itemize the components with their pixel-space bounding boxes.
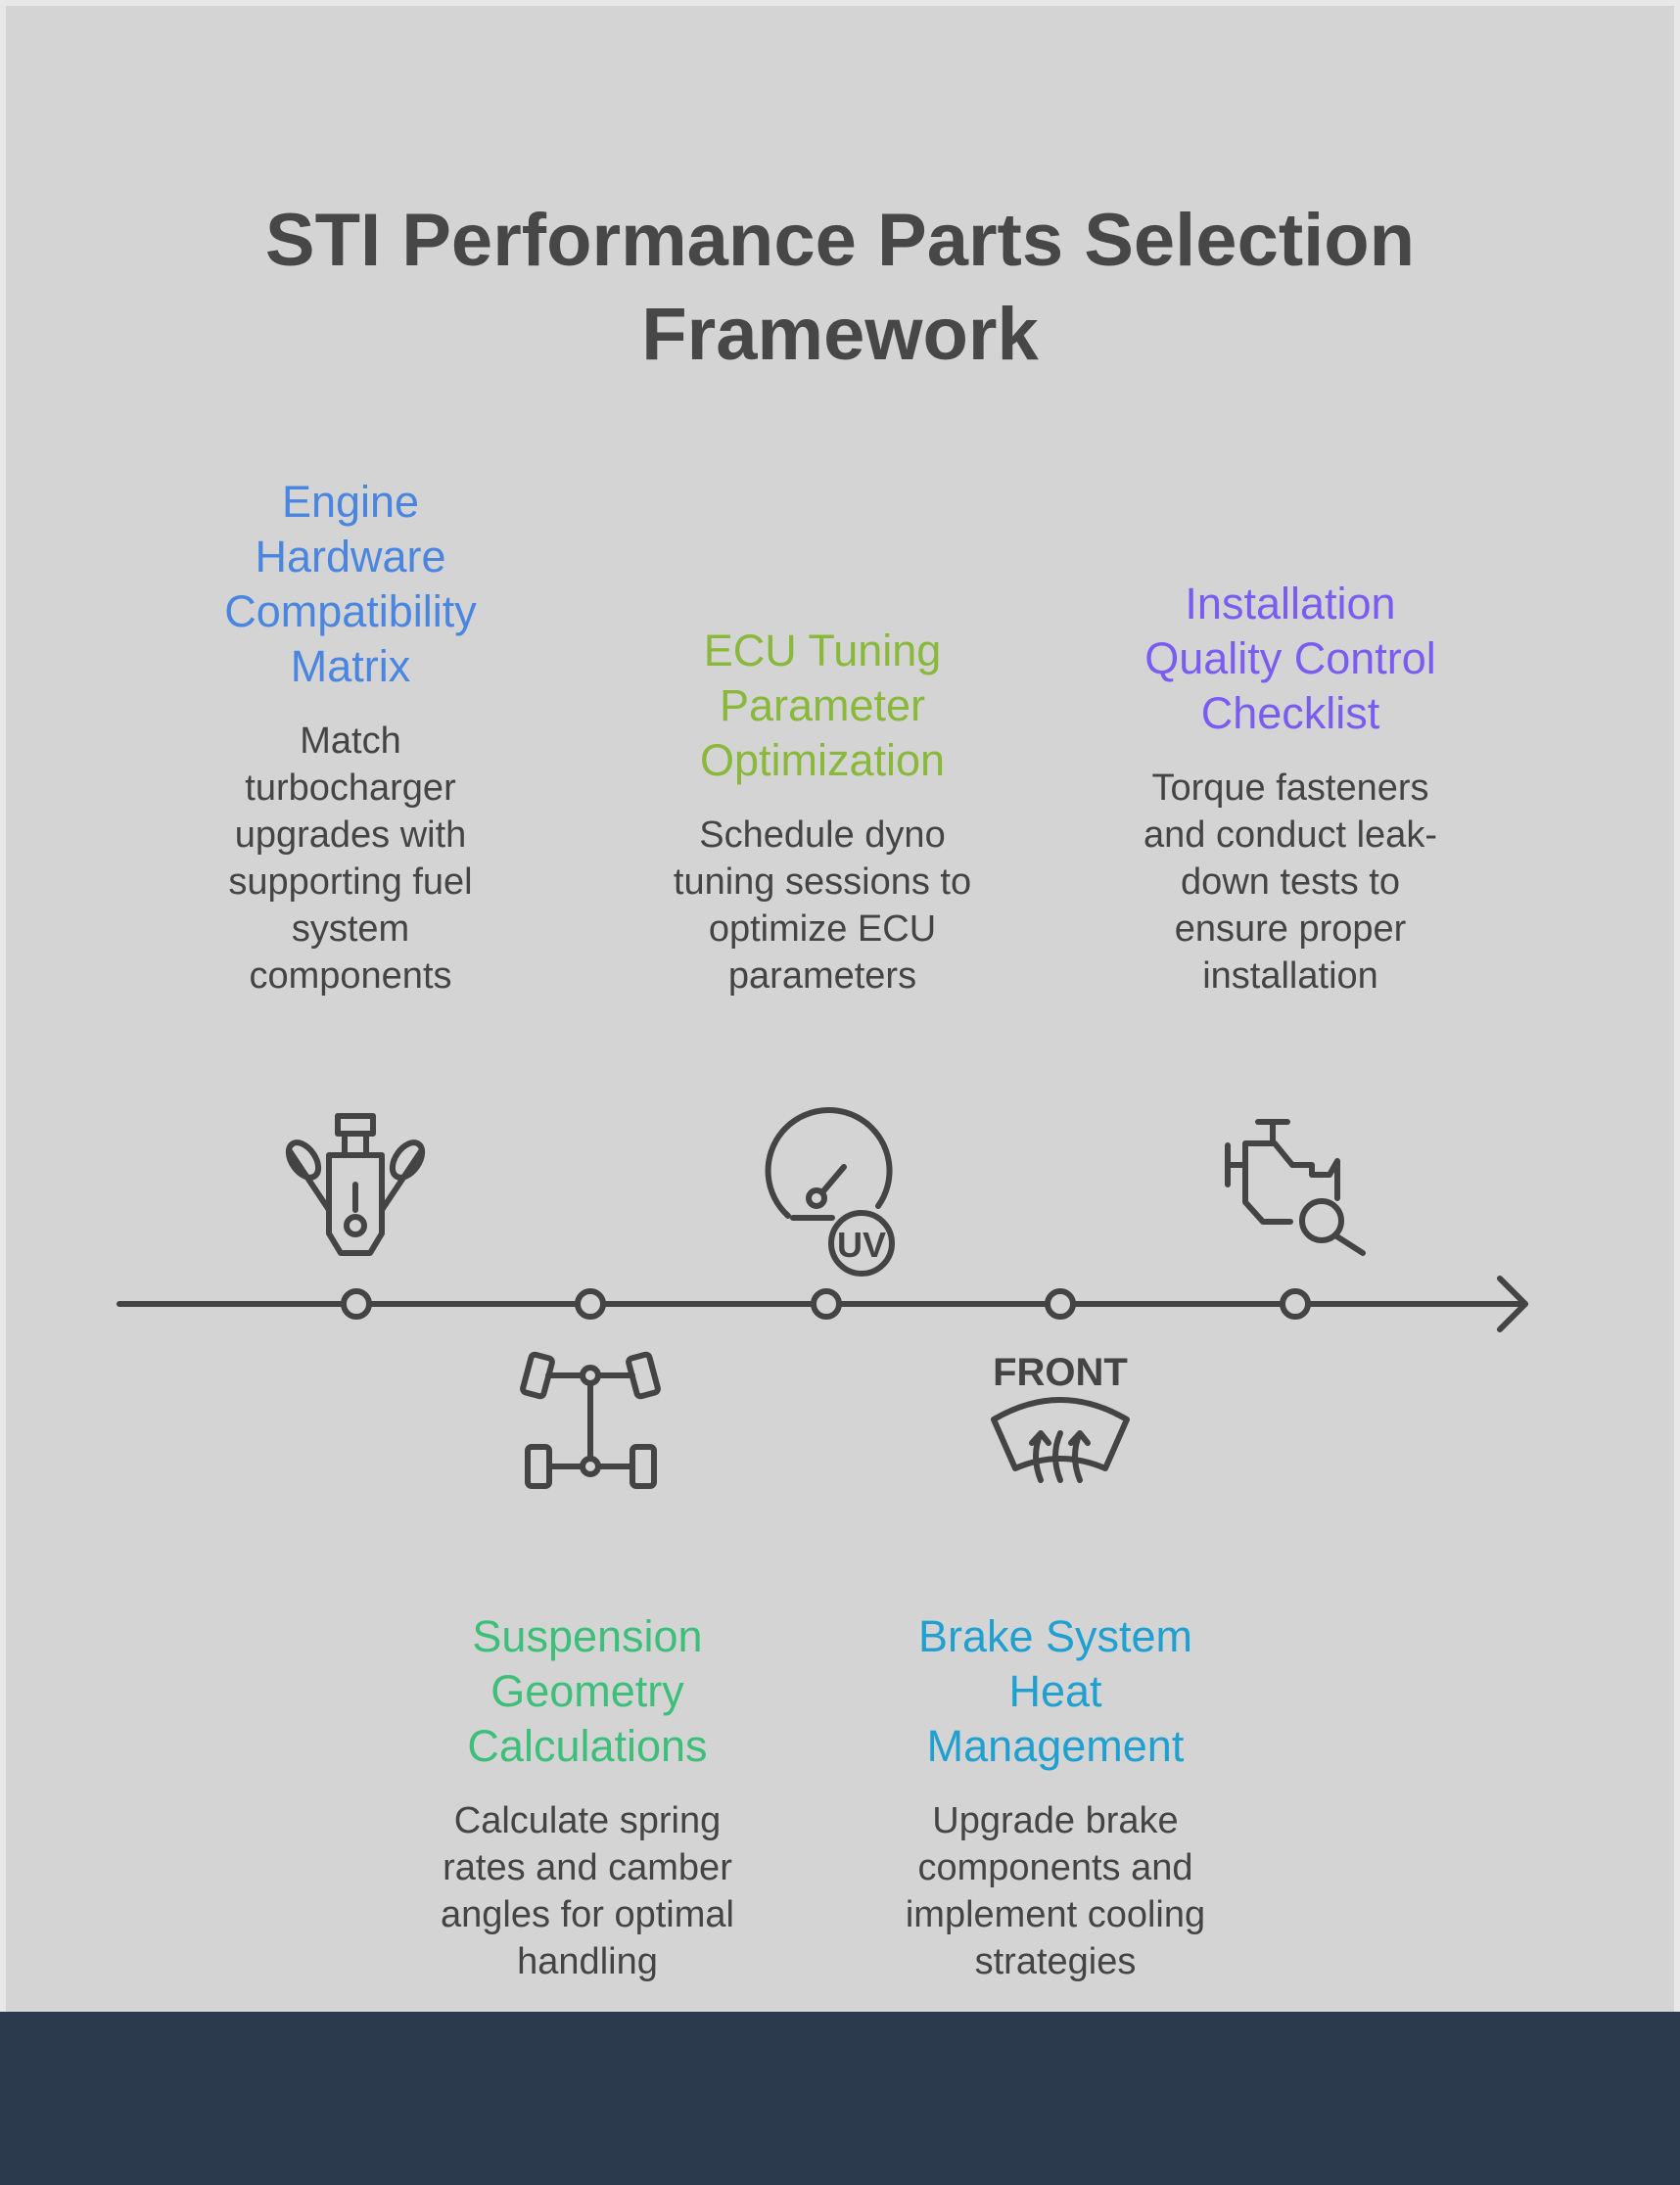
text: engine: system — [292, 908, 409, 950]
heading: engine: Engine — [282, 477, 419, 527]
heading: installation: Installation — [1185, 579, 1396, 628]
icon: gauge: UV — [837, 1225, 886, 1265]
icon: suspension — [522, 1354, 659, 1486]
heading: engine: Hardware — [255, 532, 446, 581]
title: Framework — [641, 293, 1039, 376]
text: ECU — [674, 814, 971, 997]
panel: ECU tuning — [674, 626, 971, 997]
heading: suspension: Calculations — [467, 1721, 708, 1771]
heading: installation: Checklist — [1201, 688, 1379, 738]
panel: brake — [906, 1611, 1205, 1982]
icon: front defrost — [993, 1351, 1128, 1480]
heading: installation: Quality Control — [1144, 633, 1436, 683]
title: STI Performance Parts Selection — [265, 199, 1415, 282]
text: installation: installation — [1202, 955, 1378, 997]
text: engine: turbocharger — [245, 767, 456, 809]
heading: brake: Heat — [1008, 1666, 1102, 1716]
text: suspension: Calculate spring — [454, 1800, 721, 1841]
heading: ECU — [700, 626, 945, 785]
text: suspension: handling — [517, 1941, 658, 1982]
heading: brake: Management — [927, 1721, 1184, 1771]
text: brake — [906, 1800, 1205, 1982]
text: ECU: tuning sessions to — [674, 861, 971, 903]
text: suspension: angles for optimal — [441, 1894, 734, 1935]
text: brake: implement cooling — [906, 1894, 1205, 1935]
text: engine: upgrades with — [235, 814, 466, 856]
panel: engine hardware — [224, 477, 477, 997]
heading: suspension: Suspension — [472, 1611, 703, 1661]
text: engine: Match — [300, 721, 401, 762]
icon: check engine — [1228, 1122, 1363, 1253]
text: installation: Torque fasteners — [1151, 767, 1429, 809]
text: engine — [228, 721, 473, 997]
text: installation: ensure proper — [1175, 908, 1406, 950]
icon: gauge — [769, 1110, 892, 1274]
heading: engine — [224, 477, 477, 691]
heading: brake — [918, 1611, 1192, 1771]
text: suspension: rates and camber — [443, 1847, 732, 1888]
text: installation: down tests to — [1181, 861, 1400, 903]
text: engine: supporting fuel — [228, 861, 473, 903]
panel: suspension — [441, 1611, 734, 1982]
heading: ECU: ECU Tuning — [704, 626, 941, 675]
text: engine: components — [249, 955, 452, 997]
text: ECU: parameters — [728, 955, 916, 997]
heading: ECU: Parameter — [720, 680, 925, 730]
text: installation — [1143, 767, 1437, 997]
text: brake: strategies — [975, 1941, 1136, 1982]
heading: brake: Brake System — [918, 1611, 1192, 1661]
icon: front defrost: FRONT — [993, 1351, 1128, 1394]
timeline axis arrow — [119, 1278, 1525, 1329]
icon: engine — [283, 1116, 428, 1253]
heading: engine: Matrix — [291, 641, 410, 691]
text: ECU: optimize ECU — [709, 908, 936, 950]
heading: engine: Compatibility — [224, 586, 477, 636]
text: ECU: Schedule dyno — [699, 814, 946, 856]
text: suspension — [441, 1800, 734, 1982]
heading: installation — [1144, 579, 1436, 738]
heading: suspension — [467, 1611, 708, 1771]
text: brake: components and — [918, 1847, 1192, 1888]
panel: installation — [1143, 579, 1437, 997]
heading: ECU: Optimization — [700, 735, 945, 785]
title — [265, 199, 1415, 376]
text: installation: and conduct leak- — [1143, 814, 1437, 856]
heading: suspension: Geometry — [490, 1666, 684, 1716]
text: brake: Upgrade brake — [932, 1800, 1179, 1841]
